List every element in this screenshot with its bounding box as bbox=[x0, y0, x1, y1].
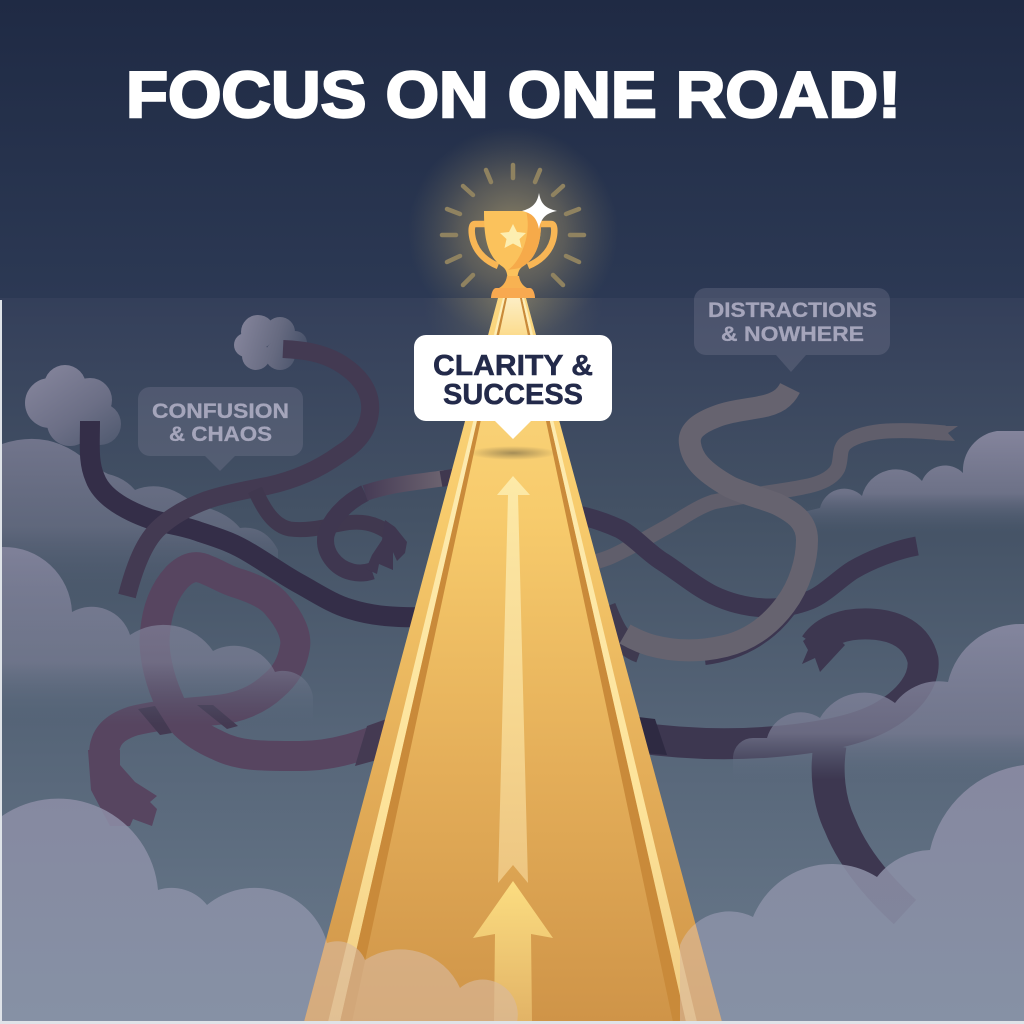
road: frayed end of loop bbox=[366, 520, 407, 574]
clouds: bottom left and right bbox=[2, 765, 1024, 1022]
trophy foot bbox=[497, 276, 529, 289]
road: gray S curve bbox=[625, 388, 807, 650]
callout: confusion and chaos: CONFUSION bbox=[152, 400, 289, 423]
road: gray lower branch bbox=[565, 431, 945, 570]
right dark edge line bbox=[520, 298, 686, 1022]
left dark edge line bbox=[340, 298, 507, 1022]
trophy base bbox=[491, 288, 535, 298]
shadow under callout bbox=[469, 446, 557, 460]
clouds: left mid bbox=[2, 547, 313, 725]
right cream edge line bbox=[522, 298, 697, 1022]
clouds: right mid bbox=[733, 624, 1024, 780]
road: frayed hook tip bbox=[802, 625, 845, 672]
main golden road bbox=[304, 298, 722, 1022]
callout: clarity and success bbox=[414, 335, 612, 439]
callout: confusion and chaos: & CHAOS bbox=[169, 423, 272, 446]
road: frayed purple end bbox=[88, 750, 157, 826]
cloud: left top small bbox=[25, 365, 121, 446]
callout: clarity and success: SUCCESS bbox=[443, 379, 583, 411]
cloud: left top second small bbox=[234, 315, 307, 370]
title: FOCUS ON ONE ROAD! bbox=[126, 58, 901, 131]
road: dark underside of S curve bbox=[705, 605, 795, 660]
center arrow long bbox=[497, 476, 530, 883]
road: fading branch start bbox=[441, 474, 470, 479]
callout: distractions and nowhere bbox=[694, 288, 890, 372]
road: dark descending bbox=[828, 745, 905, 912]
trophy glow bbox=[408, 127, 618, 368]
road: dark stub under S curve bbox=[605, 607, 640, 652]
road: crossing shadow patches bbox=[138, 705, 395, 766]
trophy cup shade bbox=[508, 211, 541, 270]
trophy cup bbox=[484, 211, 541, 282]
image edge highlight bbox=[0, 300, 1024, 1024]
road: dark wavy road bbox=[555, 513, 917, 608]
road: curve from small cloud bbox=[127, 349, 370, 596]
road: fading branch bbox=[365, 478, 445, 493]
road: dark hook bbox=[620, 624, 923, 744]
road: dark road from cloud to main road bbox=[90, 421, 430, 617]
callout: distractions and nowhere: & NOWHERE bbox=[721, 323, 864, 346]
road: dark section beside main road bbox=[630, 716, 667, 755]
center arrow lower bbox=[473, 881, 553, 1022]
road: large purple loop bbox=[104, 567, 395, 756]
callout: clarity and success: CLARITY & bbox=[433, 350, 593, 382]
callout: confusion and chaos bbox=[138, 387, 303, 471]
road: small branch bbox=[255, 490, 392, 535]
road: frayed gray tip bbox=[935, 426, 958, 441]
road: looping branch bbox=[326, 493, 372, 573]
callout: distractions and nowhere: DISTRACTIONS bbox=[708, 299, 877, 322]
left cream edge line bbox=[328, 298, 505, 1022]
clouds overlapping the golden road bbox=[2, 765, 1024, 1022]
trophy star bbox=[500, 224, 526, 248]
trophy rays bbox=[442, 165, 584, 285]
clouds: upper background bbox=[2, 431, 1024, 600]
trophy handles bbox=[472, 224, 554, 266]
trophy icon bbox=[442, 165, 584, 298]
sparkle bbox=[522, 193, 557, 229]
road top highlight bbox=[491, 298, 536, 345]
tangled roads: left side bbox=[88, 349, 470, 826]
tangled roads: right side bbox=[555, 388, 958, 912]
